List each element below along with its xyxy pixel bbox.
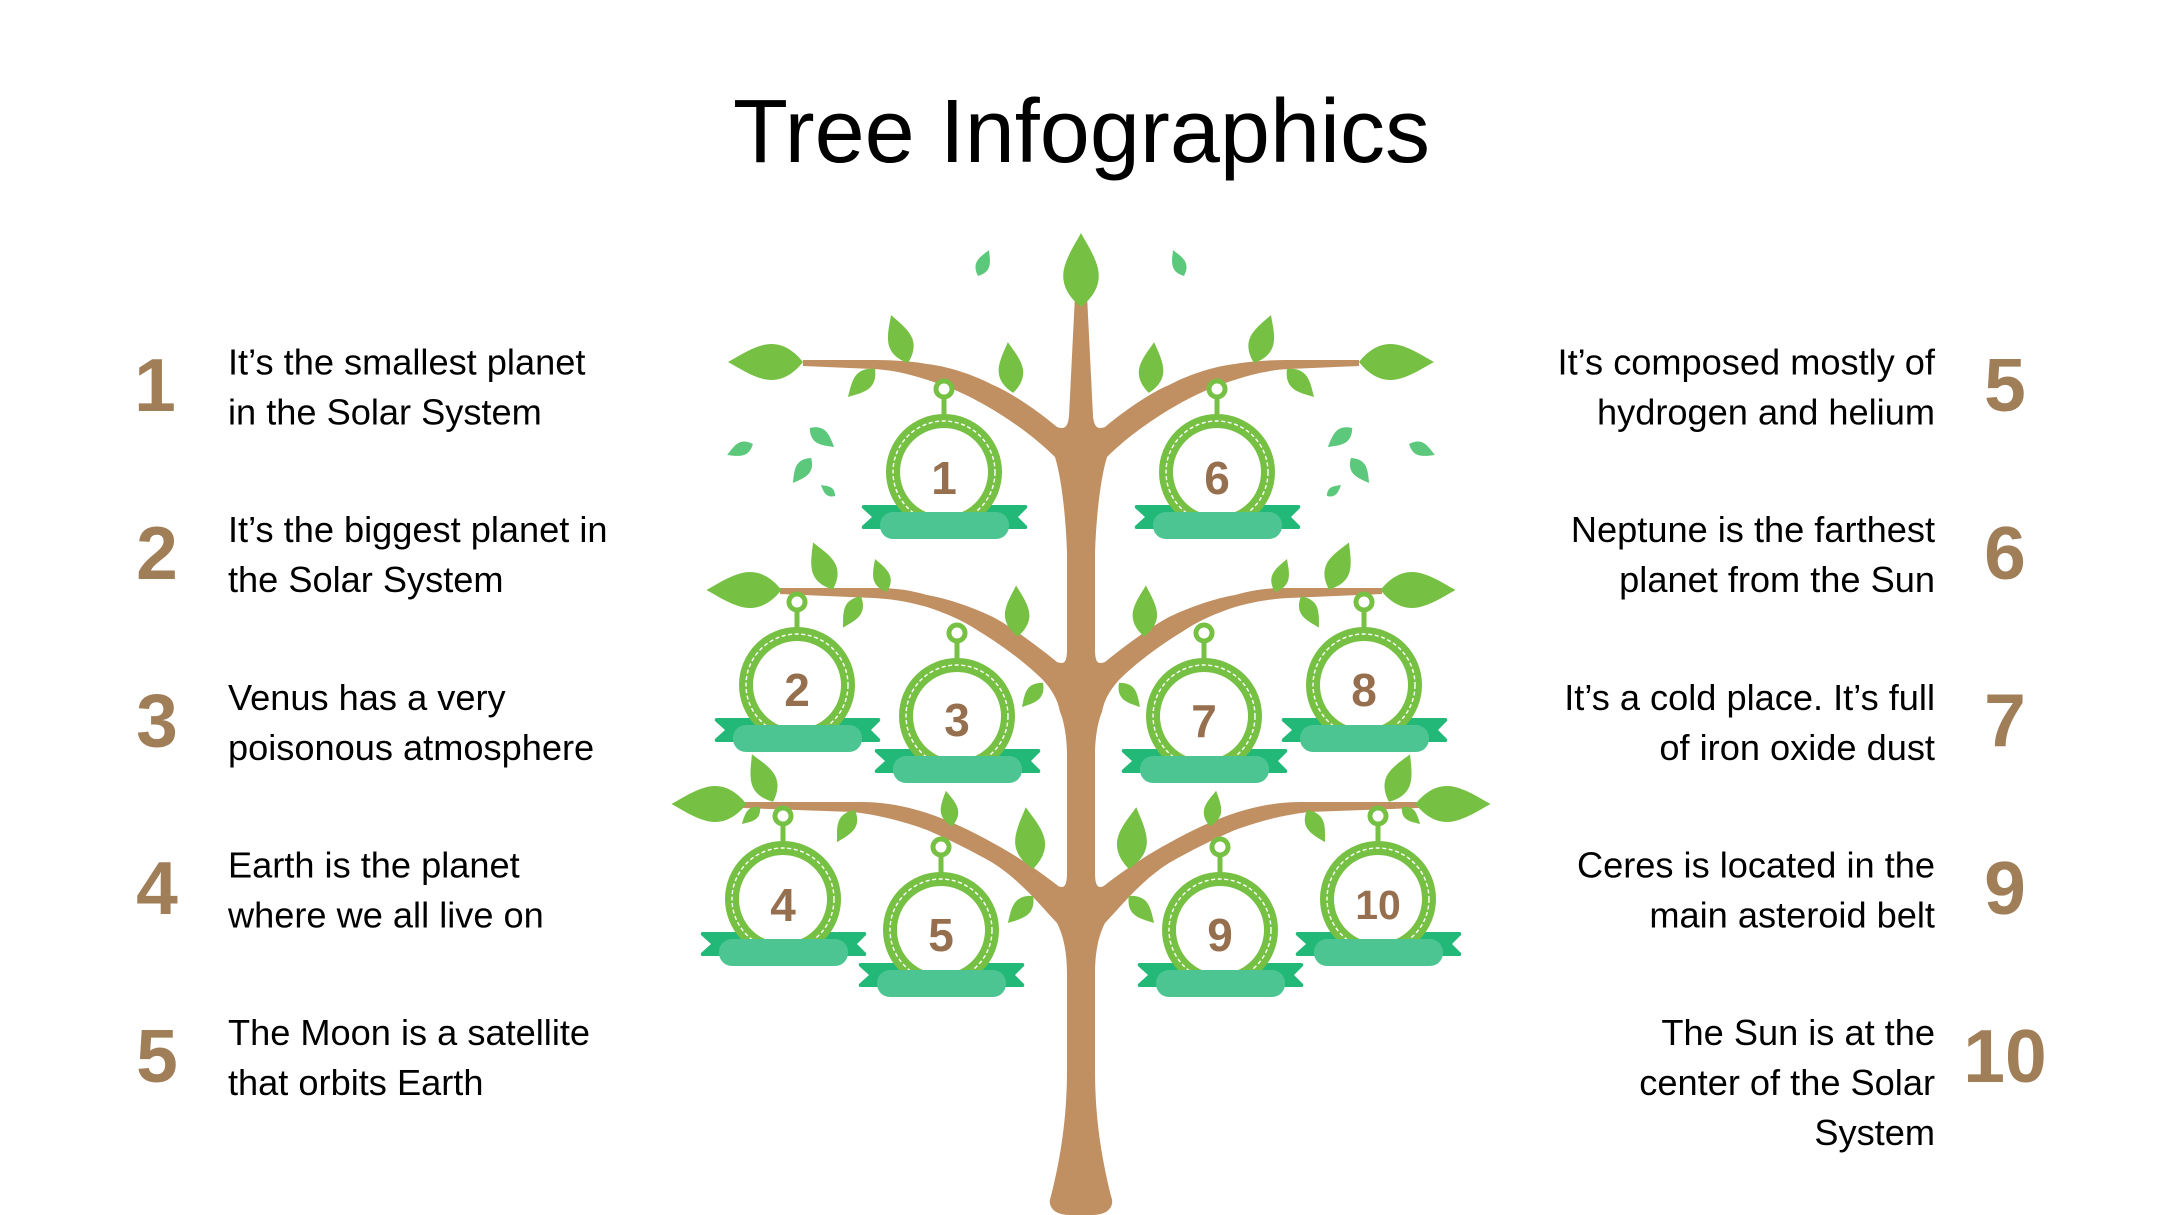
list item 10, labelled 10	[1639, 1012, 2047, 1153]
hanging badge 4: 4	[770, 879, 796, 931]
hanging badge 3	[875, 625, 1040, 783]
hanging badge 1	[862, 381, 1027, 539]
hanging badge 2: 2	[784, 664, 810, 716]
falling leaves, right	[1167, 247, 1438, 499]
list item 9, labelled 9: 9	[1984, 846, 2026, 930]
list item 5: that orbits Earth	[228, 1062, 483, 1103]
hanging badge 5	[859, 839, 1024, 997]
hanging badge 9	[1138, 839, 1303, 997]
list item 7, labelled 6: planet from the Sun	[1619, 559, 1935, 600]
list item 4: where we all live on	[227, 894, 544, 935]
hanging badge 6	[1135, 381, 1300, 539]
list item 5: 5	[136, 1014, 178, 1098]
list item 6, labelled 5: 5	[1984, 343, 2026, 427]
list item 9, labelled 9: Ceres is located in the	[1577, 844, 1935, 885]
list item 1: in the Solar System	[228, 392, 542, 433]
hanging badge 8: 8	[1351, 664, 1377, 716]
list item 3: Venus has a very	[228, 677, 507, 718]
list item 5: The Moon is a satellite	[228, 1012, 590, 1053]
list item 8, labelled 7: It’s a cold place. It’s full	[1564, 677, 1935, 718]
list item 10, labelled 10: 10	[1963, 1014, 2047, 1098]
list item 6, labelled 5: hydrogen and helium	[1597, 392, 1935, 433]
hanging badge 5: 5	[928, 909, 954, 961]
list item 5	[136, 1012, 590, 1103]
hanging badge 3: 3	[944, 694, 970, 746]
right branch leaves	[1113, 311, 1490, 929]
list item 1	[134, 342, 585, 433]
list item 6, labelled 5: It’s composed mostly of	[1558, 342, 1936, 383]
list item 2: It’s the biggest planet in	[228, 509, 608, 550]
list item 2: 2	[136, 511, 178, 595]
list item 8, labelled 7: 7	[1984, 678, 2026, 762]
tree trunk and branches, right half	[1080, 295, 1419, 1215]
tree illustration	[672, 233, 1490, 1215]
list item 7, labelled 6: Neptune is the farthest	[1571, 509, 1935, 550]
list item 10, labelled 10: center of the Solar	[1639, 1062, 1935, 1103]
list item 9, labelled 9: main asteroid belt	[1649, 894, 1935, 935]
hanging badge 2	[715, 594, 880, 752]
list item 3: 3	[136, 678, 178, 762]
hanging badge 10: 10	[1355, 882, 1401, 928]
list item 6, labelled 5	[1558, 342, 2026, 433]
hanging badge 6: 6	[1204, 452, 1230, 504]
hanging badge 8	[1282, 594, 1447, 752]
list item 3: poisonous atmosphere	[228, 727, 594, 768]
falling leaves, left	[724, 247, 995, 499]
icon: top leaf	[1063, 233, 1099, 307]
title: Tree Infographics	[733, 82, 1430, 182]
list item 8, labelled 7: of iron oxide dust	[1659, 727, 1935, 768]
hanging badge 7	[1122, 625, 1287, 783]
hanging badge 1: 1	[931, 452, 957, 504]
left branch leaves	[672, 311, 1049, 929]
hanging badge 4	[701, 808, 866, 966]
list item 3	[136, 677, 594, 768]
hanging badge 10	[1296, 808, 1461, 966]
list item 2	[136, 509, 608, 600]
list item 1: 1	[134, 343, 176, 427]
list item 7, labelled 6	[1571, 509, 2026, 600]
list item 9, labelled 9	[1577, 844, 2026, 935]
list item 10, labelled 10: The Sun is at the	[1661, 1012, 1935, 1053]
list item 4	[136, 844, 544, 935]
list item 7, labelled 6: 6	[1984, 511, 2026, 595]
list item 2: the Solar System	[228, 559, 504, 600]
list item 4: 4	[136, 846, 178, 930]
list item 10, labelled 10: System	[1814, 1112, 1935, 1153]
hanging badge 7: 7	[1191, 695, 1217, 747]
hanging badge 9: 9	[1207, 909, 1233, 961]
list item 1: It’s the smallest planet	[228, 342, 585, 383]
list item 8, labelled 7	[1564, 677, 2026, 768]
list item 4: Earth is the planet	[228, 844, 520, 885]
tree trunk and branches, left half	[743, 295, 1082, 1215]
